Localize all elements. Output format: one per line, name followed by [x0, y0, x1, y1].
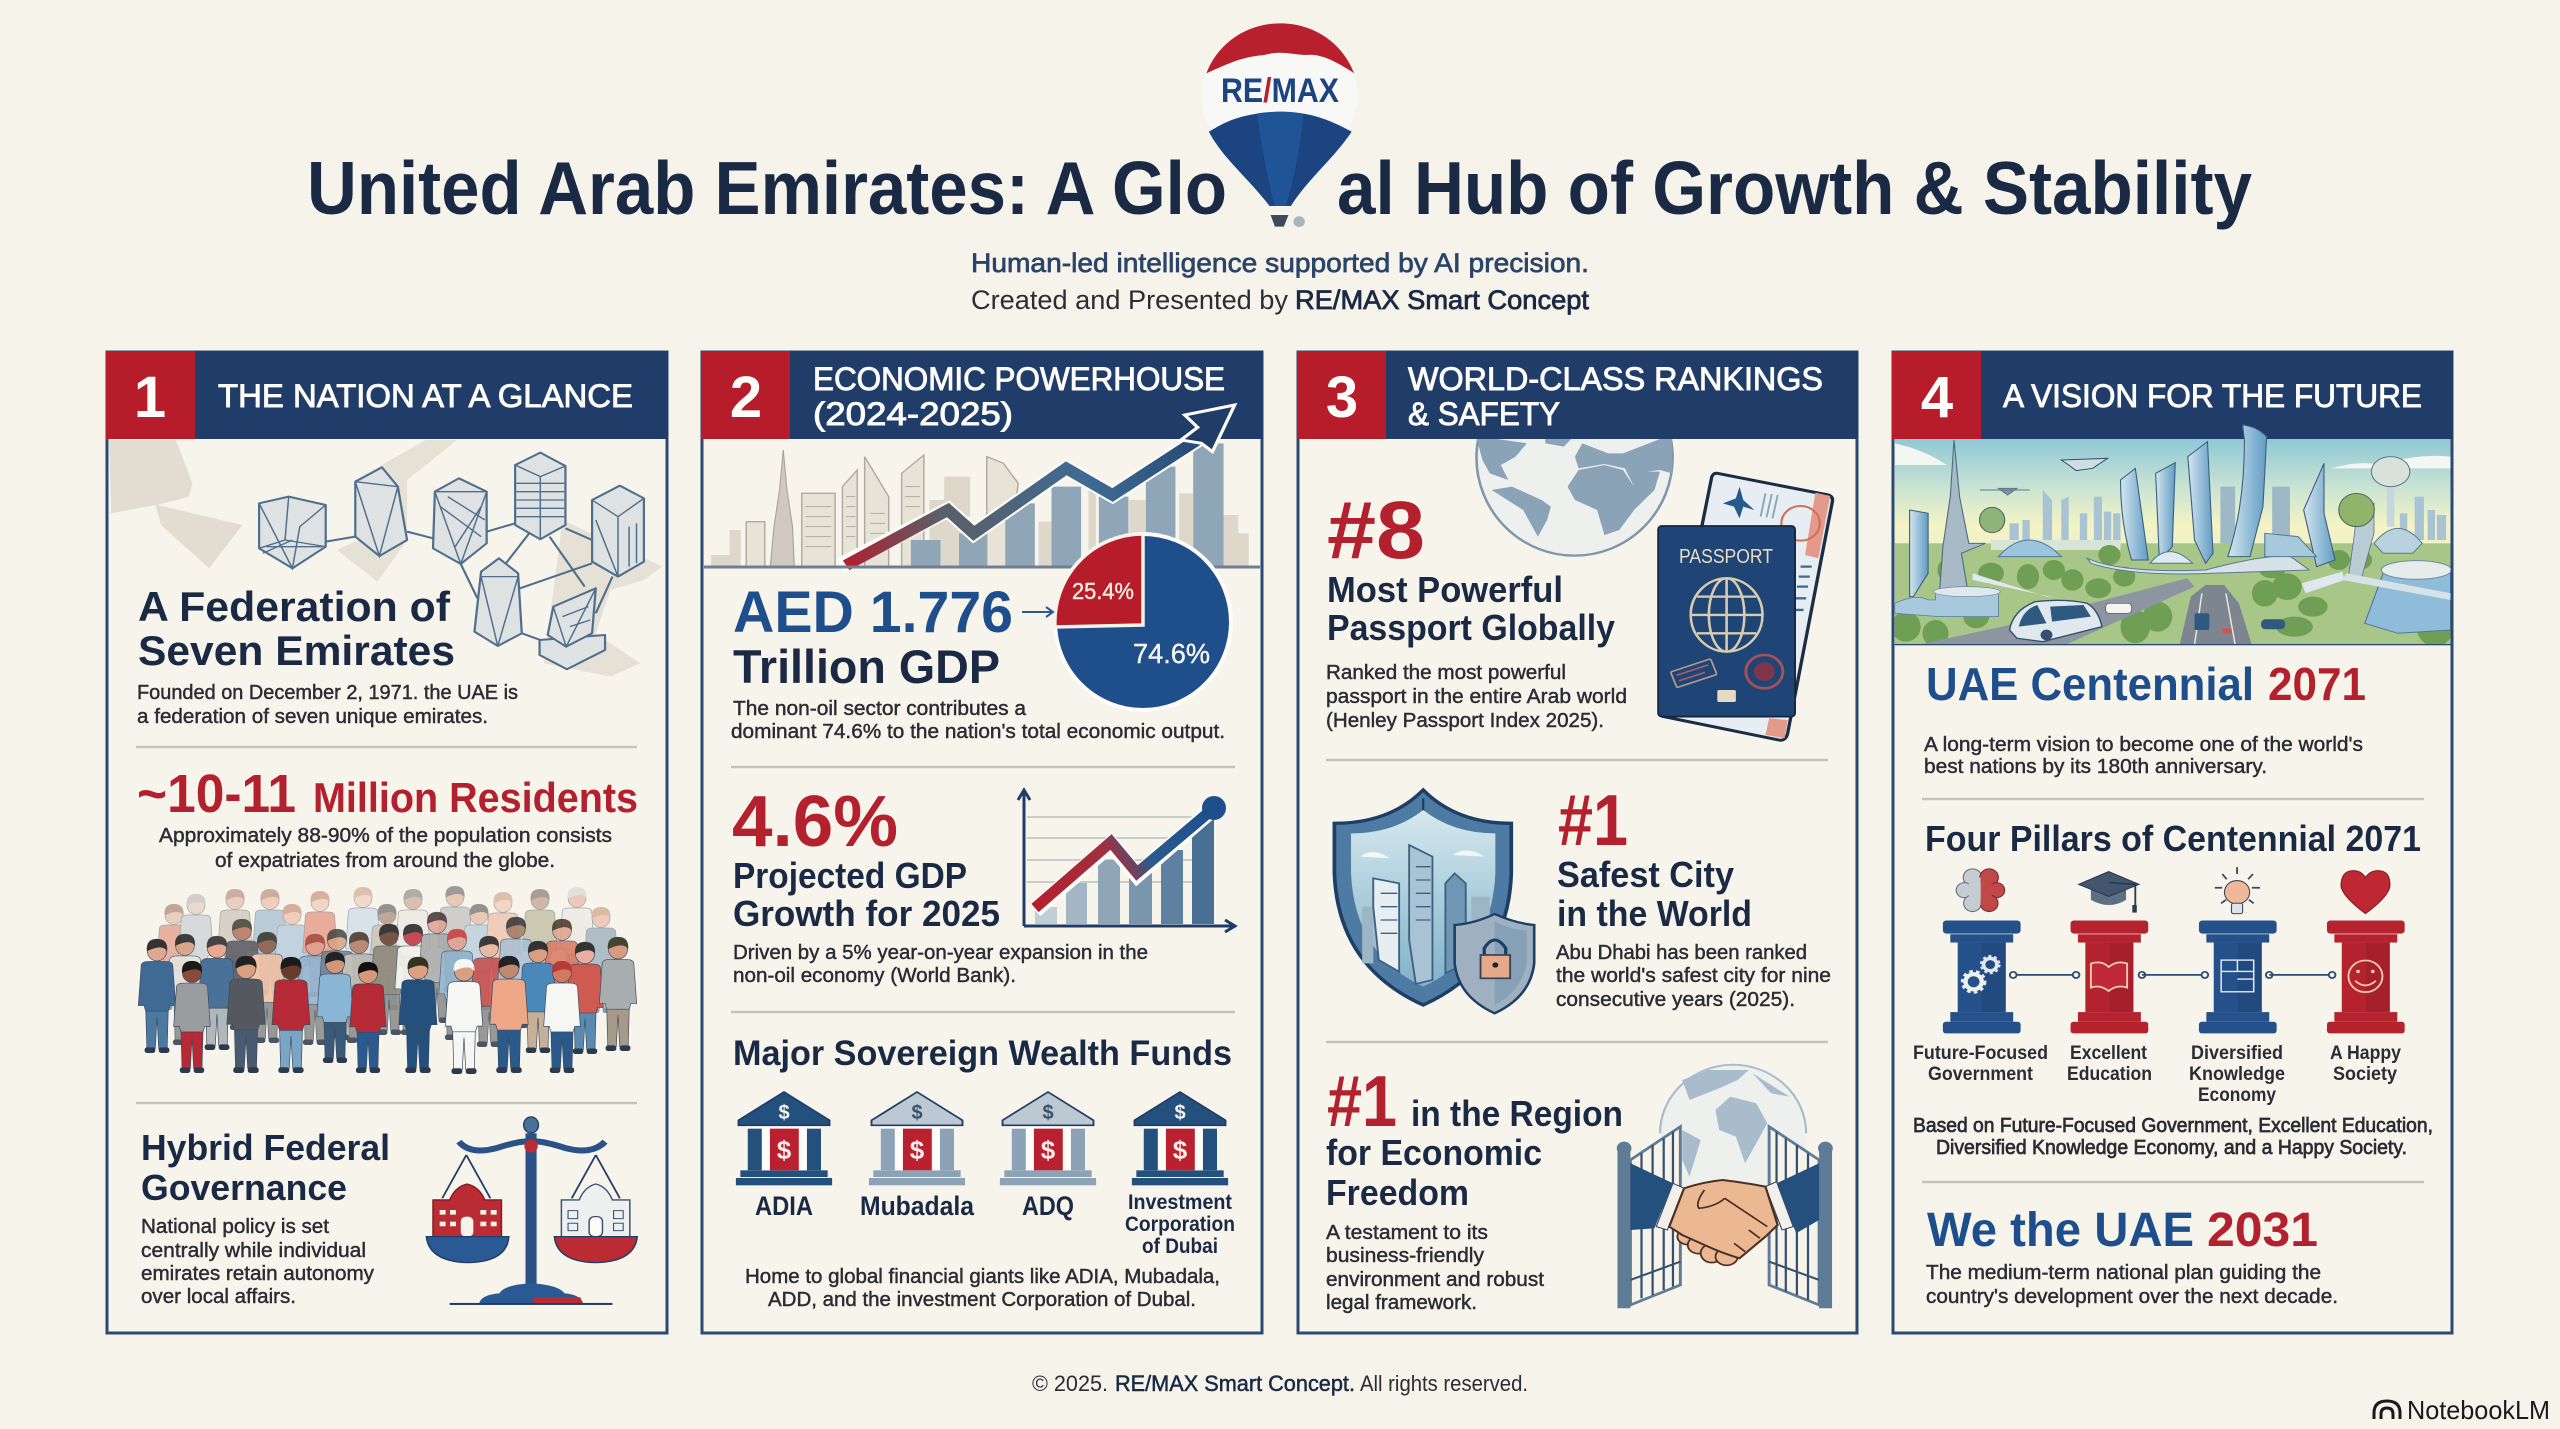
- heading: passport: [1327, 569, 1615, 648]
- icon: shield with city and lock: [1334, 790, 1534, 1013]
- icons: sovereign wealth fund banks: $: [910, 1135, 925, 1165]
- pillar labels: Future-Focused: [1913, 1043, 2048, 1064]
- panel: a vision for the future: [1891, 351, 2454, 1333]
- stat: GDP growth: [732, 782, 1000, 934]
- heading: centennial: UAE Centennial: [1926, 658, 2254, 710]
- fund labels: of Dubai: [1142, 1235, 1218, 1258]
- text: safest city: [1556, 942, 1831, 1011]
- title: al Hub of Growth & Stability: [1337, 146, 2252, 230]
- heading: safest city: [1557, 854, 1752, 934]
- icon: passport and boarding pass: [1658, 473, 1833, 740]
- panel frame: [702, 352, 1262, 1333]
- text: non-oil: The non-oil sector contributes a: [733, 698, 1027, 720]
- pillar labels: [1913, 1043, 2401, 1106]
- diagram: four pillars: [1943, 867, 2405, 1033]
- heading: governance: [141, 1127, 390, 1208]
- panel header: [1892, 351, 2453, 439]
- heading: federation: A Federation of: [138, 583, 451, 630]
- text: safest city: Abu Dhabi has been ranked: [1556, 942, 1807, 964]
- text: centennial: A long-term vision to become one of the world's: [1924, 734, 2363, 756]
- text: economic freedom: environment and robust: [1326, 1269, 1544, 1291]
- text: non-oil: [731, 698, 1225, 743]
- text: passport: (Henley Passport Index 2025).: [1326, 710, 1604, 732]
- subtitle: Human-led intelligence supported by AI precision.: [971, 248, 1589, 278]
- text: economic freedom: [1326, 1222, 1544, 1314]
- text: founded: Founded on December 2, 1971. the UAE is: [137, 682, 518, 704]
- text: centennial: [1924, 734, 2363, 778]
- stat: GDP: AED 1.776: [733, 580, 1013, 645]
- heading: passport: Most Powerful: [1327, 569, 1563, 610]
- text: we the UAE: The medium-term national plan guiding the: [1926, 1262, 2321, 1284]
- pillar: diversified knowledge economy: [2199, 867, 2277, 1033]
- stat: safest city: #1: [1558, 781, 1628, 861]
- fund labels: ADIA: [755, 1191, 813, 1221]
- subtitle: [971, 248, 1590, 315]
- text: economic freedom: business-friendly: [1326, 1245, 1484, 1267]
- panel frame: [1298, 352, 1857, 1333]
- pie chart: non-oil share of GDP: 74.6%: [1133, 638, 1210, 669]
- subtitle: RE/MAX Smart Concept: [1295, 285, 1590, 315]
- stat: economic freedom: [1326, 1062, 1623, 1213]
- text: growth: non-oil economy (World Bank).: [733, 965, 1016, 987]
- stat: GDP growth: 4.6%: [732, 782, 898, 862]
- text: safest city: the world's safest city for nine: [1556, 965, 1831, 987]
- icon: RE/MAX balloon: RE/MAX: [1221, 72, 1339, 110]
- panel header: 4: [1921, 365, 1953, 430]
- fund labels: ADQ: [1022, 1191, 1074, 1221]
- pillar labels: Economy: [2198, 1085, 2276, 1106]
- stat: GDP growth: Growth for 2025: [733, 893, 1000, 934]
- text: passport: [1326, 662, 1627, 732]
- text: passport: Ranked the most powerful: [1326, 662, 1566, 684]
- text: founded: a federation of seven unique emirates.: [137, 706, 488, 728]
- pillar labels: Society: [2333, 1064, 2397, 1085]
- icon: balance scale with buildings: [426, 1117, 637, 1305]
- text: funds: [745, 1266, 1220, 1311]
- icons: sovereign wealth fund banks: [736, 1092, 1228, 1185]
- footer copyright: RE/MAX Smart Concept.: [1115, 1371, 1355, 1396]
- heading: sovereign funds: Major Sovereign Wealth Funds: [733, 1034, 1232, 1073]
- panel header: 1: [134, 365, 166, 430]
- text: economic freedom: A testament to its: [1326, 1222, 1488, 1244]
- text: governance: [141, 1216, 374, 1308]
- pillar labels: A Happy: [2330, 1043, 2401, 1064]
- panel frame: [1893, 352, 2452, 1333]
- heading: governance: Hybrid Federal: [141, 1127, 390, 1168]
- stat: economic freedom: Freedom: [1326, 1172, 1469, 1213]
- text: passport: passport in the entire Arab world: [1326, 686, 1627, 708]
- title: United Arab Emirates: A Glo: [307, 146, 1227, 230]
- panel header: 2: [730, 365, 762, 430]
- icons: sovereign wealth fund banks: $: [1174, 1102, 1186, 1124]
- heading: we the UAE: 2031: [2207, 1204, 2318, 1257]
- panel header: WORLD-CLASS RANKINGS: [1408, 361, 1823, 397]
- stat: residents: ~10-11: [137, 764, 296, 824]
- panel header: (2024-2025): [813, 396, 1013, 432]
- text: expatriates: [159, 825, 612, 872]
- panel header: [106, 351, 668, 439]
- footer copyright: [1032, 1371, 1528, 1396]
- icons: sovereign wealth fund banks: $: [911, 1102, 923, 1124]
- stat: passport rank: #8: [1327, 485, 1425, 576]
- panel header: [701, 351, 1263, 439]
- heading: we the UAE: [1927, 1204, 2318, 1257]
- illustration: skyline with growth arrow: [711, 405, 1249, 567]
- heading: federation: Seven Emirates: [138, 627, 455, 674]
- text: non-oil: dominant 74.6% to the nation's total economic output.: [731, 721, 1225, 743]
- pillar: future-focused government: [1943, 869, 2021, 1033]
- icon: passport and boarding pass: PASSPORT: [1679, 546, 1773, 568]
- stat: residents: Million Residents: [313, 774, 638, 821]
- text: growth: [733, 942, 1148, 987]
- footer copyright: © 2025.: [1032, 1371, 1108, 1396]
- stat: economic freedom: for Economic: [1326, 1132, 1542, 1173]
- pillar labels: Diversified: [2191, 1043, 2283, 1064]
- stat: GDP: [733, 580, 1013, 693]
- text: growth: Driven by a 5% year-on-year expansion in the: [733, 942, 1148, 964]
- heading: centennial: 2071: [2268, 658, 2366, 710]
- icons: sovereign wealth fund banks: $: [1042, 1102, 1054, 1124]
- fund labels: Investment: [1128, 1191, 1232, 1214]
- heading: safest city: Safest City: [1557, 854, 1734, 895]
- text: we the UAE: country's development over the next decade.: [1926, 1286, 2338, 1308]
- panel header: [1297, 351, 1858, 439]
- panel: economic powerhouse: [701, 351, 1263, 1333]
- fund labels: Corporation: [1125, 1213, 1235, 1236]
- text: safest city: consecutive years (2025).: [1556, 989, 1795, 1011]
- illustration: crowd of residents: [138, 886, 637, 1074]
- heading: governance: Governance: [141, 1167, 347, 1208]
- panel header: 3: [1326, 365, 1358, 430]
- text: governance: emirates retain autonomy: [141, 1263, 374, 1285]
- stat: economic freedom: #1: [1327, 1062, 1397, 1142]
- illustration: seven emirates network: [109, 440, 662, 677]
- icon: globe: [1475, 439, 1674, 557]
- text: expatriates: Approximately 88-90% of the population consists: [159, 825, 612, 847]
- pillar labels: Government: [1928, 1064, 2034, 1085]
- stat: economic freedom: in the Region: [1411, 1093, 1623, 1134]
- arrow: GDP to pie: [1022, 607, 1053, 617]
- text: governance: National policy is set: [141, 1216, 329, 1238]
- text: expatriates: of expatriates from around the globe.: [215, 850, 555, 872]
- footer copyright: All rights reserved.: [1360, 1371, 1528, 1396]
- panel header: ECONOMIC POWERHOUSE: [813, 361, 1225, 397]
- heading: safest city: in the World: [1557, 893, 1752, 934]
- pillar labels: Excellent: [2070, 1043, 2148, 1064]
- text: founded: [137, 682, 518, 728]
- pillar: a happy society: [2327, 871, 2405, 1033]
- text: we the UAE: [1926, 1262, 2338, 1308]
- text: pillars summary: Diversified Knowledge Economy, and a Happy Society.: [1936, 1137, 2407, 1159]
- title: [307, 146, 2252, 230]
- text: funds: ADD, and the investment Corporation of Dubal.: [768, 1289, 1196, 1311]
- NotebookLM badge: NotebookLM: [2407, 1395, 2550, 1425]
- illustration: future city: [1891, 425, 2454, 647]
- icons: sovereign wealth fund banks: $: [1041, 1135, 1056, 1165]
- panel: the nation at a glance: [106, 351, 668, 1333]
- fund labels: [755, 1191, 1235, 1258]
- panel: world-class rankings: [1297, 351, 1858, 1333]
- heading: we the UAE: We the UAE: [1927, 1204, 2194, 1257]
- text: centennial: best nations by its 180th anniversary.: [1924, 756, 2267, 778]
- icons: sovereign wealth fund banks: $: [778, 1102, 790, 1124]
- line and bar chart: GDP growth: [1018, 790, 1235, 932]
- pillar: excellent education: [2071, 872, 2148, 1033]
- text: governance: over local affairs.: [141, 1286, 296, 1308]
- icon: handshake at open gates: [1617, 1065, 1833, 1308]
- pillar labels: Education: [2067, 1064, 2152, 1085]
- panel frame: [107, 352, 667, 1333]
- heading: four pillars: Four Pillars of Centennial 2071: [1925, 818, 2421, 859]
- heading: federation: [138, 583, 455, 674]
- panel header: & SAFETY: [1408, 396, 1560, 432]
- subtitle: Created and Presented by: [971, 285, 1288, 315]
- connectors between pillars: [2010, 972, 2335, 978]
- pie chart: non-oil share of GDP: 25.4%: [1072, 578, 1134, 604]
- stat: GDP growth: Projected GDP: [733, 855, 967, 896]
- icons: sovereign wealth fund banks: $: [1173, 1135, 1188, 1165]
- icons: sovereign wealth fund banks: $: [777, 1135, 792, 1165]
- text: pillars summary: [1913, 1115, 2433, 1159]
- heading: passport: Passport Globally: [1327, 607, 1615, 648]
- stat: residents: [137, 764, 638, 824]
- fund labels: Mubadala: [860, 1191, 975, 1221]
- stat: GDP: Trillion GDP: [733, 640, 1000, 693]
- text: funds: Home to global financial giants like ADIA, Mubadala,: [745, 1266, 1220, 1288]
- text: pillars summary: Based on Future-Focused Government, Excellent Education,: [1913, 1115, 2433, 1137]
- pie chart: non-oil share of GDP: [1055, 534, 1231, 710]
- panel header: THE NATION AT A GLANCE: [218, 378, 633, 414]
- panel header: A VISION FOR THE FUTURE: [2003, 378, 2422, 414]
- text: economic freedom: legal framework.: [1326, 1292, 1477, 1314]
- pillar labels: Knowledge: [2189, 1064, 2285, 1085]
- text: governance: centrally while individual: [141, 1240, 366, 1262]
- icon: RE/MAX balloon: [1201, 23, 1358, 227]
